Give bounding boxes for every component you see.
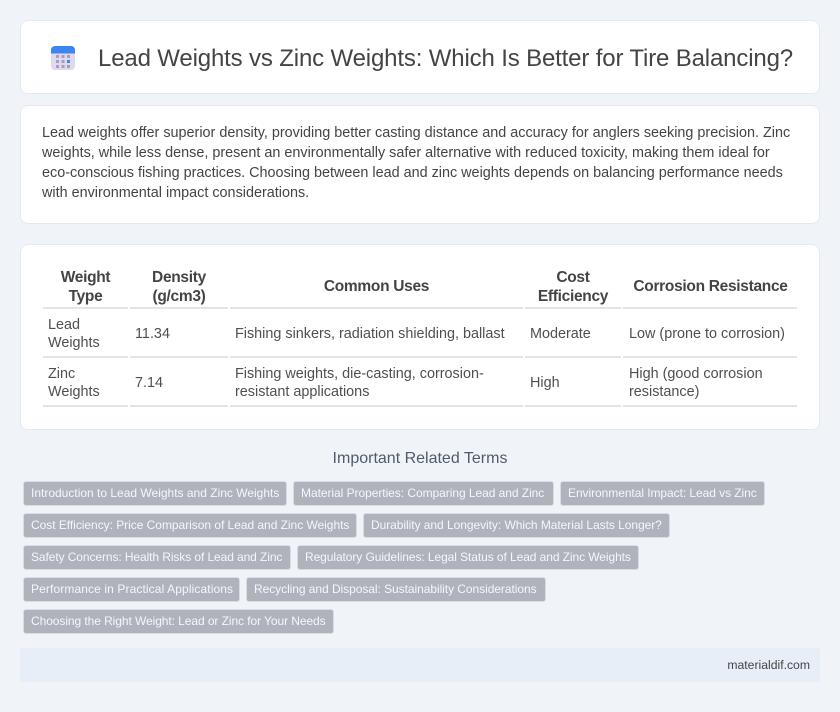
table header: Corrosion Resistance (633, 278, 788, 295)
text block: summary paragraph: Lead weights offer superior density, providing better casting distance and accuracy for anglers seeking precision. Zinc (42, 125, 790, 141)
table row: zinc weights: resistant applications (235, 384, 369, 400)
table row: zinc weights: High (530, 375, 560, 391)
table header: Type (69, 288, 102, 305)
tag: Recycling and Disposal: Sustainability Considerations (254, 582, 537, 596)
text block: summary paragraph: weights, while less dense, present an environmentally safer alternative with reduced toxicity, making them ideal for (42, 145, 770, 161)
table header: (g/cm3) (152, 288, 206, 305)
table header (60, 269, 788, 305)
tag (560, 481, 765, 506)
table header: Common Uses (324, 278, 429, 295)
table header: Weight (61, 269, 110, 286)
tag (363, 513, 670, 538)
panel: comparison table (20, 244, 820, 430)
table row: lead weights: Low (prone to corrosion) (629, 326, 785, 342)
tag: Environmental Impact: Lead vs Zinc (568, 486, 757, 500)
panel: footer (20, 648, 820, 682)
panel: related term tags (23, 481, 765, 634)
panel: title card (20, 20, 820, 94)
tag: Cost Efficiency: Price Comparison of Lead and Zinc Weights (31, 518, 349, 532)
tag (23, 545, 291, 570)
tag: Regulatory Guidelines: Legal Status of Lead and Zinc Weights (305, 550, 631, 564)
table row: zinc weights: Fishing weights, die-casting, corrosion- (235, 366, 484, 382)
text block: summary paragraph (42, 125, 790, 201)
tag: Performance in Practical Applications (31, 582, 233, 596)
tag: Introduction to Lead Weights and Zinc Weights (31, 486, 279, 500)
text block: summary paragraph: with environmental impact considerations. (42, 185, 309, 201)
tag (297, 545, 639, 570)
table row: zinc weights: High (good corrosion (629, 366, 763, 382)
table row: zinc weights: 7.14 (135, 375, 163, 391)
tag (23, 609, 334, 634)
tag (246, 577, 546, 602)
table row: lead weights: Lead (48, 317, 80, 333)
tag: Choosing the Right Weight: Lead or Zinc for Your Needs (31, 614, 326, 628)
heading: related terms: Important Related Terms (333, 450, 507, 467)
tag (23, 577, 240, 602)
footer source text: materialdif.com (727, 658, 810, 672)
tag: Safety Concerns: Health Risks of Lead and Zinc (31, 550, 282, 564)
tag (293, 481, 554, 506)
table header: Efficiency (538, 288, 608, 305)
table row: zinc weights: Zinc (48, 366, 75, 382)
table header: Cost (556, 269, 590, 286)
table row: lead weights: Fishing sinkers, radiation shielding, ballast (235, 326, 505, 342)
tag (23, 481, 287, 506)
panel: summary (20, 105, 820, 224)
table row: lead weights: Weights (48, 335, 100, 351)
table row: lead weights: 11.34 (135, 326, 170, 342)
table row: zinc weights (48, 366, 763, 400)
tag: Material Properties: Comparing Lead and Zinc (301, 486, 544, 500)
text block: summary paragraph: eco-conscious fishing practices. Choosing between lead and zinc weights depends on balancing performance needs (42, 165, 783, 181)
tag (23, 513, 357, 538)
table header: Density (152, 269, 206, 286)
table row: zinc weights: resistance) (629, 384, 699, 400)
icon: calendar (51, 46, 75, 70)
table row: lead weights (48, 317, 785, 351)
table row: lead weights: Moderate (530, 326, 591, 342)
tag: Durability and Longevity: Which Material Lasts Longer? (371, 518, 662, 532)
title: Lead Weights vs Zinc Weights: Which Is Better for Tire Balancing? (98, 45, 793, 72)
table row: zinc weights: Weights (48, 384, 100, 400)
